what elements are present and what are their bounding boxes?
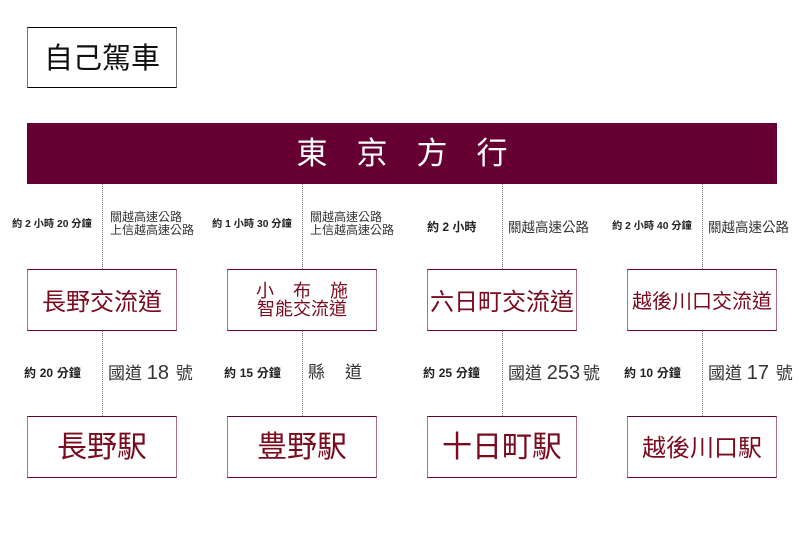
route: Toyono upper xyxy=(310,210,394,236)
banner: towards Tokyo xyxy=(27,123,777,184)
route: National Road 18: 國道 18 號 xyxy=(108,362,193,384)
station: Nagano xyxy=(27,416,177,478)
time: Nagano lower: 約 20 分鐘 xyxy=(24,366,81,380)
route: Nagano upper xyxy=(110,210,194,236)
route: Nagano upper: 關越高速公路 xyxy=(110,210,182,224)
time: Echigo-Kawaguchi upper: 約 2 小時 40 分鐘 xyxy=(612,221,692,232)
interchange: Echigo-Kawaguchi: 越後川口交流道 xyxy=(632,291,772,313)
station: Toyono: 豊野駅 xyxy=(257,431,347,464)
interchange: Nagano: 長野交流道 xyxy=(42,289,162,316)
station: Nagano: 長野駅 xyxy=(57,431,147,464)
time: Echigo-Kawaguchi lower: 約 10 分鐘 xyxy=(624,366,681,380)
interchange: Muikamachi xyxy=(427,269,577,331)
column connectors xyxy=(102,184,703,416)
station: Tokamachi xyxy=(427,416,577,478)
interchange: Obuse: 小布施 xyxy=(256,281,367,301)
route: Toyono upper: 上信越高速公路 xyxy=(310,222,394,236)
station: Echigo-Kawaguchi: 越後川口駅 xyxy=(642,435,762,462)
title: self drive: 自己駕車 xyxy=(44,43,160,75)
time: Nagano upper: 約 2 小時 20 分鐘 xyxy=(12,219,92,230)
route: Prefectural Road: 縣道 xyxy=(308,363,382,382)
time: Toyono lower: 約 15 分鐘 xyxy=(224,366,281,380)
route: Nagano upper: 上信越高速公路 xyxy=(110,222,194,236)
station: Echigo-Kawaguchi xyxy=(627,416,777,478)
route: Echigo-Kawaguchi upper: 關越高速公路 xyxy=(708,220,789,235)
interchange: Echigo-Kawaguchi xyxy=(627,269,777,331)
route: National Road 17: 國道 17 號 xyxy=(708,362,793,384)
time: Tokamachi lower: 約 25 分鐘 xyxy=(423,366,480,380)
interchange: Obuse: 智能交流道 xyxy=(257,299,347,319)
interchange: Nagano xyxy=(27,269,177,331)
title: self drive xyxy=(27,27,177,88)
interchange: Muikamachi: 六日町交流道 xyxy=(430,289,574,316)
station: Toyono xyxy=(227,416,377,478)
route: Toyono upper: 關越高速公路 xyxy=(310,210,382,224)
interchange: Obuse xyxy=(227,269,377,331)
time: Toyono upper: 約 1 小時 30 分鐘 xyxy=(212,219,292,230)
time: Tokamachi upper: 約 2 小時 xyxy=(427,220,476,234)
banner: towards Tokyo: 東京方行 xyxy=(296,136,536,171)
station: Tokamachi: 十日町駅 xyxy=(442,431,562,464)
route: Tokamachi upper: 關越高速公路 xyxy=(508,220,589,235)
route: National Road 253: 國道 253 號 xyxy=(508,362,600,384)
